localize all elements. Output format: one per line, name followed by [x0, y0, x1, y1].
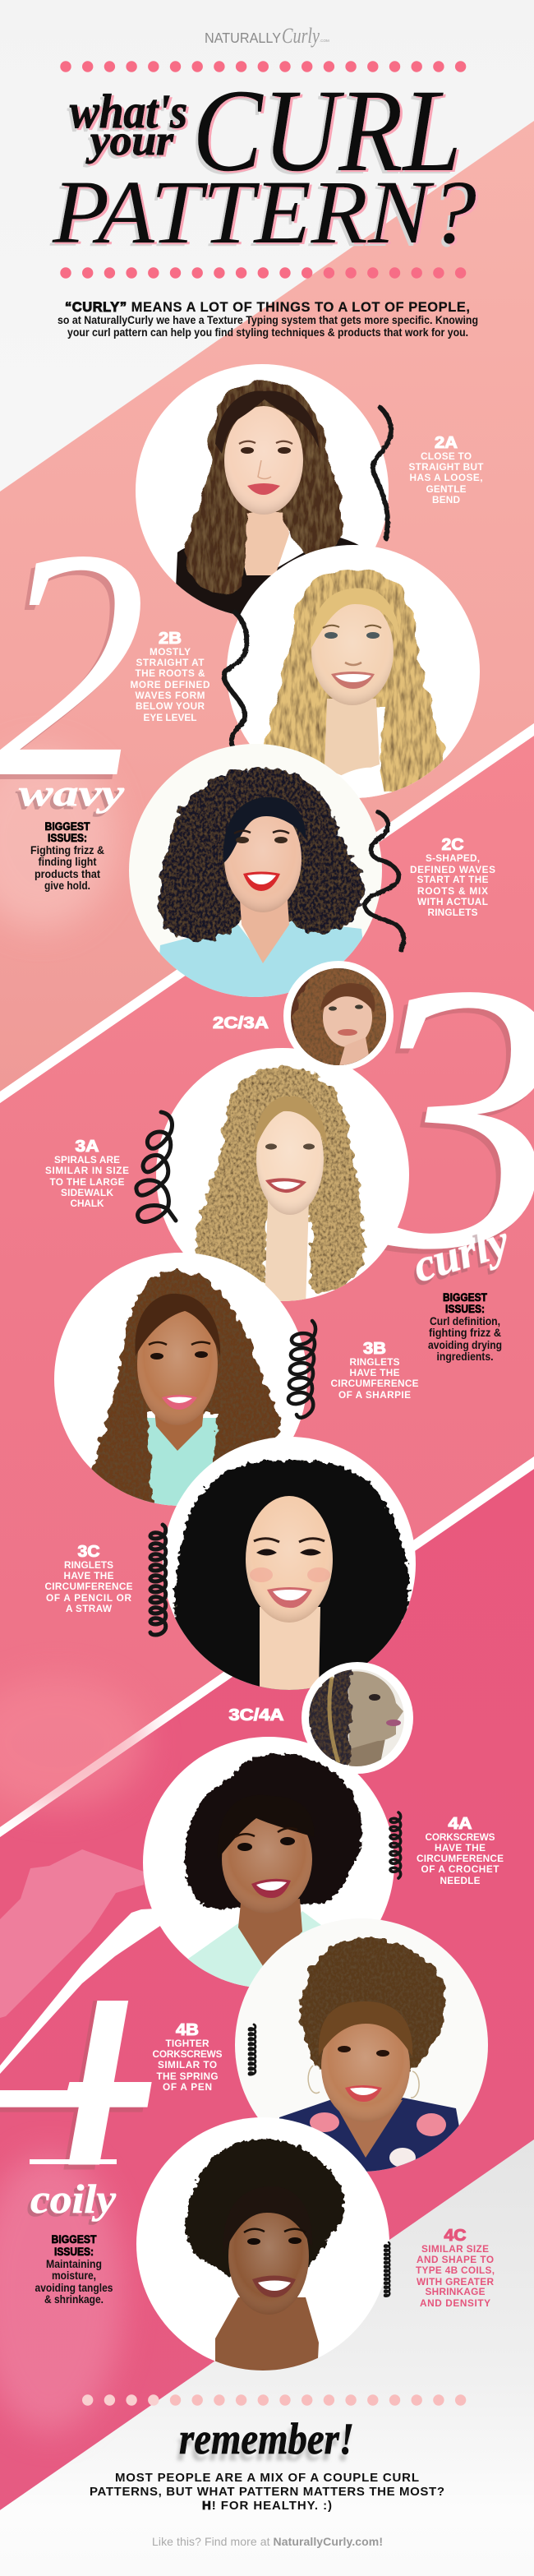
caption 3B — [330, 1340, 419, 1401]
caption 3A: SPIRALS ARE — [54, 1154, 120, 1166]
spiral curl 3B — [288, 1321, 315, 1418]
biggest issues: wavy: ISSUES: — [48, 832, 87, 844]
neck and top 2B — [325, 699, 380, 777]
title — [52, 66, 476, 262]
logo: NaturallyCurly: .COM — [320, 39, 329, 43]
biggest issues: curly: ISSUES: — [445, 1303, 485, 1315]
caption 4B: THE SPRING — [156, 2070, 219, 2082]
caption 4B: TIGHTER — [166, 2038, 209, 2049]
neck 3A — [265, 1200, 309, 1307]
biggest issues: wavy: give hold. — [44, 879, 90, 892]
biggest issues: wavy: BIGGEST — [44, 820, 90, 833]
biggest issues: coily: avoiding tangles — [35, 2282, 113, 2294]
intro text: your curl pattern can help you find styling techniques & products that work for you. — [67, 326, 468, 339]
intro text: “CURLY” MEANS A LOT OF THINGS TO A LOT OF PEOPLE, — [65, 300, 470, 315]
caption 2B: BELOW YOUR — [136, 700, 205, 712]
script word: coily: coily — [30, 2176, 117, 2222]
biggest issues: coily — [35, 2233, 113, 2306]
dotted divider below title — [60, 267, 466, 279]
caption 3A: SIDEWALK — [61, 1187, 113, 1198]
neck 2A — [245, 512, 289, 575]
caption 4B: CORKSCREWS — [153, 2048, 223, 2060]
portrait 2C — [129, 744, 382, 1003]
facial features 2B — [323, 626, 381, 689]
caption 4C: AND SHAPE TO — [417, 2254, 494, 2265]
face 2C/3A — [323, 996, 372, 1047]
caption 4A: OF A CROCHET — [421, 1863, 499, 1875]
biggest issues: coily: & shrinkage. — [44, 2293, 104, 2306]
closing message: MOST PEOPLE ARE A MIX OF A COUPLE CURL — [115, 2471, 419, 2485]
facial features 2C/3A — [329, 1004, 363, 1036]
caption 2C: WITH ACTUAL — [417, 896, 488, 907]
neck 4C — [215, 2297, 319, 2375]
hair 3B — [92, 1271, 281, 1505]
facial features 3A — [265, 1143, 315, 1193]
biggest issues: curly: Curl definition, — [430, 1315, 500, 1327]
hair 4B — [300, 1938, 445, 2071]
caption 2C: 2C — [442, 836, 463, 854]
caption 3A: TO THE LARGE — [49, 1176, 125, 1188]
caption 3B: HAVE THE — [350, 1367, 400, 1378]
caption 3C: CIRCUMFERENCE — [44, 1581, 133, 1592]
biggest issues: coily: ISSUES: — [54, 2246, 94, 2258]
facial features 2A — [239, 441, 292, 495]
dotted divider bottom — [82, 2394, 466, 2406]
biggest issues: coily: moisture, — [52, 2269, 96, 2282]
logo: NaturallyCurly: Curly — [282, 24, 320, 48]
facial features 4B — [338, 2046, 389, 2102]
biggest issues: wavy: products that — [35, 868, 100, 880]
caption 3C: 3C — [77, 1543, 100, 1561]
caption 2C/3A: 2C/3A — [213, 1014, 269, 1032]
spiral curl 4C — [384, 2242, 389, 2297]
caption 2C: DEFINED WAVES — [410, 864, 495, 875]
caption 3B: OF A SHARPIE — [338, 1389, 411, 1401]
caption 4C — [416, 2227, 495, 2309]
shirt 2A — [176, 538, 360, 615]
caption 2A: STRAIGHT BUT — [409, 461, 484, 473]
neck 3B — [154, 1410, 204, 1451]
face 3C — [246, 1496, 333, 1623]
caption 3C: A STRAW — [66, 1603, 113, 1614]
shirt 4B — [279, 2098, 468, 2178]
caption 4C: WITH GREATER — [417, 2276, 494, 2287]
caption 2C — [410, 836, 495, 918]
face 3B — [137, 1304, 218, 1425]
caption 2A: BEND — [432, 494, 460, 506]
portrait 3B — [54, 1253, 307, 1512]
hair 3C/4A — [309, 1670, 351, 1767]
caption 2B — [130, 630, 210, 723]
caption 3A: SIMILAR IN SIZE — [45, 1165, 129, 1176]
neck 3C — [260, 1607, 320, 1693]
intro text — [58, 300, 478, 339]
spiral curl 4A — [390, 1812, 401, 1878]
facial features 2C — [234, 831, 289, 891]
portrait 2B — [227, 545, 480, 801]
caption 2A: GENTLE — [426, 483, 467, 495]
caption 3C — [44, 1543, 133, 1614]
heading: remember!: remember! — [179, 2414, 354, 2463]
caption 2B: WAVES FORM — [135, 690, 205, 701]
hair 2A — [186, 383, 342, 593]
facial features 3B — [149, 1342, 210, 1410]
closing message — [90, 2471, 444, 2513]
caption 3B: 3B — [363, 1340, 386, 1358]
caption 4B — [153, 2021, 223, 2093]
biggest issues: coily: BIGGEST — [51, 2233, 97, 2246]
biggest issues: curly: avoiding drying — [428, 1339, 502, 1351]
shirt 4A — [187, 1911, 321, 1987]
caption 3A: 3A — [76, 1138, 99, 1156]
caption 3B: CIRCUMFERENCE — [330, 1378, 419, 1389]
caption 2B: STRAIGHT AT — [136, 657, 205, 668]
caption 2A — [409, 434, 484, 506]
caption 4C: SIMILAR SIZE — [421, 2243, 489, 2255]
face 3C/4A — [348, 1671, 403, 1749]
curl line 2C — [365, 812, 403, 950]
biggest issues: curly — [428, 1291, 502, 1363]
spiral curl 4B — [249, 2024, 255, 2075]
caption 2A: HAS A LOOSE, — [409, 472, 483, 483]
neck 4A — [238, 1899, 302, 1969]
neck 2C — [240, 900, 289, 963]
dotted divider top — [60, 61, 466, 72]
title: your — [85, 118, 174, 164]
biggest issues: wavy: Fighting frizz & — [30, 844, 104, 856]
title: CURL — [192, 66, 462, 196]
face 2A — [224, 406, 303, 515]
caption 2C: S-SHAPED, — [426, 852, 480, 864]
script word: wavy: wavy — [19, 772, 125, 814]
portrait 3C/4A — [302, 1662, 413, 1774]
title: what's — [70, 85, 187, 138]
caption 2B: THE ROOTS & — [135, 667, 205, 679]
caption 4C: TYPE 4B COILS, — [416, 2264, 495, 2276]
biggest issues: wavy: finding light — [38, 856, 97, 868]
curl line 2A — [373, 408, 391, 538]
footer: Like this? Find more at NaturallyCurly.com! — [152, 2535, 383, 2548]
closing message: PATTERNS, BUT WHAT PATTERN MATTERS THE MOST? — [90, 2485, 444, 2499]
hair 4A — [185, 1754, 362, 1909]
biggest issues: curly: ingredients. — [437, 1350, 493, 1363]
facial features 4A — [235, 1828, 297, 1898]
title: PATTERN? — [52, 162, 476, 262]
hair 3A — [195, 1067, 365, 1292]
logo: NaturallyCurly — [205, 24, 329, 48]
caption 4B: OF A PEN — [163, 2081, 212, 2093]
caption 3C/4A: 3C/4A — [228, 1706, 284, 1724]
face 2B — [311, 604, 394, 699]
facial features 4C — [244, 2229, 306, 2297]
caption 2B: MORE DEFINED — [130, 679, 210, 690]
caption 2B: 2B — [159, 630, 182, 648]
hair 2B — [260, 569, 444, 794]
logo: NaturallyCurly: NATURALLY — [205, 30, 281, 46]
hair 2C — [159, 768, 364, 941]
top 3B — [133, 1418, 219, 1506]
caption 4C: AND DENSITY — [420, 2297, 490, 2309]
portrait 4A — [143, 1737, 394, 1993]
caption 2C: ROOTS & MIX — [417, 885, 488, 897]
spiral curl 3C — [150, 1525, 166, 1635]
caption 3B: RINGLETS — [350, 1356, 400, 1368]
portrait 3A — [156, 1048, 409, 1307]
caption 4A — [417, 1815, 504, 1886]
shirt 2C — [159, 921, 363, 997]
caption 4A: CIRCUMFERENCE — [417, 1853, 504, 1864]
face 4C — [228, 2198, 309, 2315]
caption 4A: CORKSCREWS — [426, 1831, 495, 1843]
facial features 3C — [250, 1539, 330, 1608]
caption 3A — [45, 1138, 129, 1209]
face 4A — [222, 1805, 312, 1914]
neck 4B — [333, 2100, 403, 2158]
caption 4A: HAVE THE — [435, 1842, 486, 1854]
intro text: so at NaturallyCurly we have a Texture Typing system that gets more specific. Knowing — [58, 314, 478, 326]
hair 3C — [174, 1461, 409, 1693]
biggest issues: curly: fighting frizz & — [429, 1327, 501, 1339]
closing message: H! FOR HEALTHY. :) — [202, 2499, 332, 2513]
face 4B — [321, 2010, 410, 2122]
curl line 2B — [224, 612, 246, 761]
face 2C — [224, 816, 302, 912]
caption 4C: 4C — [444, 2227, 467, 2245]
facial features 3C/4A — [369, 1694, 401, 1726]
caption 3C: HAVE THE — [64, 1570, 114, 1581]
script word: curly: curly — [407, 1215, 516, 1292]
biggest issues: curly: BIGGEST — [443, 1291, 488, 1304]
portrait 4C — [136, 2117, 389, 2375]
caption 4C: SHRINKAGE — [426, 2286, 486, 2297]
caption 2C: START AT THE — [417, 874, 489, 885]
caption 3C: RINGLETS — [64, 1559, 113, 1571]
neck 3C/4A — [349, 1734, 386, 1767]
caption 4A: 4A — [449, 1815, 472, 1833]
spiral curl 3A — [136, 1112, 176, 1221]
portrait 2C/3A — [283, 961, 394, 1071]
caption 2B: EYE LEVEL — [143, 712, 197, 723]
portrait 2A — [136, 364, 389, 625]
caption 4A: NEEDLE — [440, 1875, 481, 1886]
biggest issues: coily: Maintaining — [46, 2258, 102, 2270]
portrait 3C — [163, 1437, 416, 1693]
earring 4B — [308, 2066, 419, 2098]
caption 2C: RINGLETS — [427, 907, 478, 918]
caption 2A: 2A — [435, 434, 458, 452]
caption 3A: CHALK — [71, 1198, 104, 1209]
caption 4B: 4B — [176, 2021, 199, 2039]
caption 4B: SIMILAR TO — [158, 2059, 217, 2070]
portrait 4B — [235, 1918, 488, 2178]
hair 2C/3A — [293, 967, 390, 1069]
caption 2B: MOSTLY — [150, 646, 191, 658]
caption 3C: OF A PENCIL OR — [46, 1592, 131, 1604]
biggest issues: wavy — [30, 820, 104, 892]
hair 4C — [186, 2139, 344, 2277]
face 3A — [256, 1111, 324, 1205]
caption 2A: CLOSE TO — [421, 450, 472, 462]
